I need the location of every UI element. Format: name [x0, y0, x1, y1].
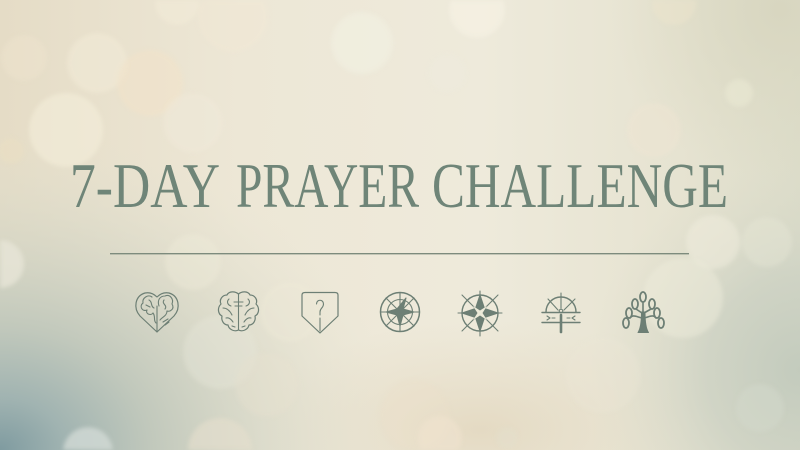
- icon: ship wheel over horizon: [542, 293, 580, 332]
- title: PRAYER: [236, 151, 419, 221]
- icon: tree: [623, 292, 664, 332]
- icon: compass rose in circle: [380, 292, 420, 332]
- icon: brain: [218, 292, 259, 331]
- title: 7-DAY: [70, 151, 220, 221]
- icon: shield with question mark: [302, 292, 338, 333]
- icon: heart with brain: [136, 293, 178, 332]
- title: CHALLENGE: [432, 151, 728, 221]
- icon: compass star: [458, 291, 502, 336]
- title: [70, 151, 728, 221]
- divider line: [110, 253, 689, 255]
- icon row: [136, 291, 664, 336]
